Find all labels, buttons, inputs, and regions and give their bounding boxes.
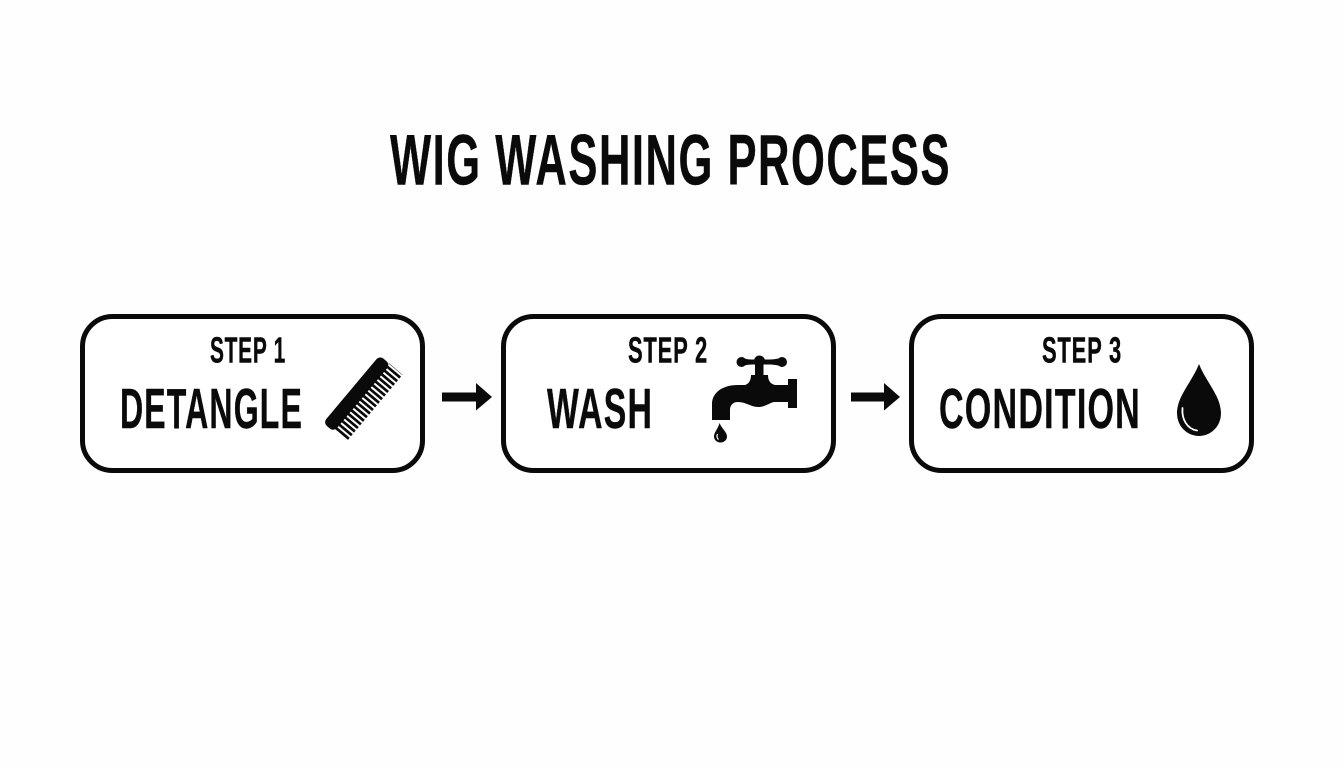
icon: comb xyxy=(323,355,396,436)
step label: step 3: STEP 3 xyxy=(1042,330,1122,370)
panel: step 3 condition xyxy=(912,316,1252,470)
drop highlight xyxy=(717,434,718,440)
step label: step 2: STEP 2 xyxy=(628,330,708,370)
panel: step 2 wash xyxy=(504,316,834,470)
arrow: step 1 to step 2 xyxy=(442,383,492,410)
title: WIG WASHING PROCESS xyxy=(390,122,951,200)
icon: faucet xyxy=(712,356,797,442)
panel outline: step 1 xyxy=(82,316,422,470)
step name: wash: WASH xyxy=(547,377,653,441)
panel outline: step 3 xyxy=(912,316,1252,470)
step label: step 1: STEP 1 xyxy=(210,330,286,370)
step name: condition: CONDITION xyxy=(939,377,1141,441)
step name: detangle: DETANGLE xyxy=(120,377,303,441)
panel outline: step 2 xyxy=(504,316,834,470)
icon: water drop xyxy=(1177,364,1221,436)
panel: step 1 detangle xyxy=(82,316,422,470)
arrow: step 2 to step 3 xyxy=(851,383,900,410)
